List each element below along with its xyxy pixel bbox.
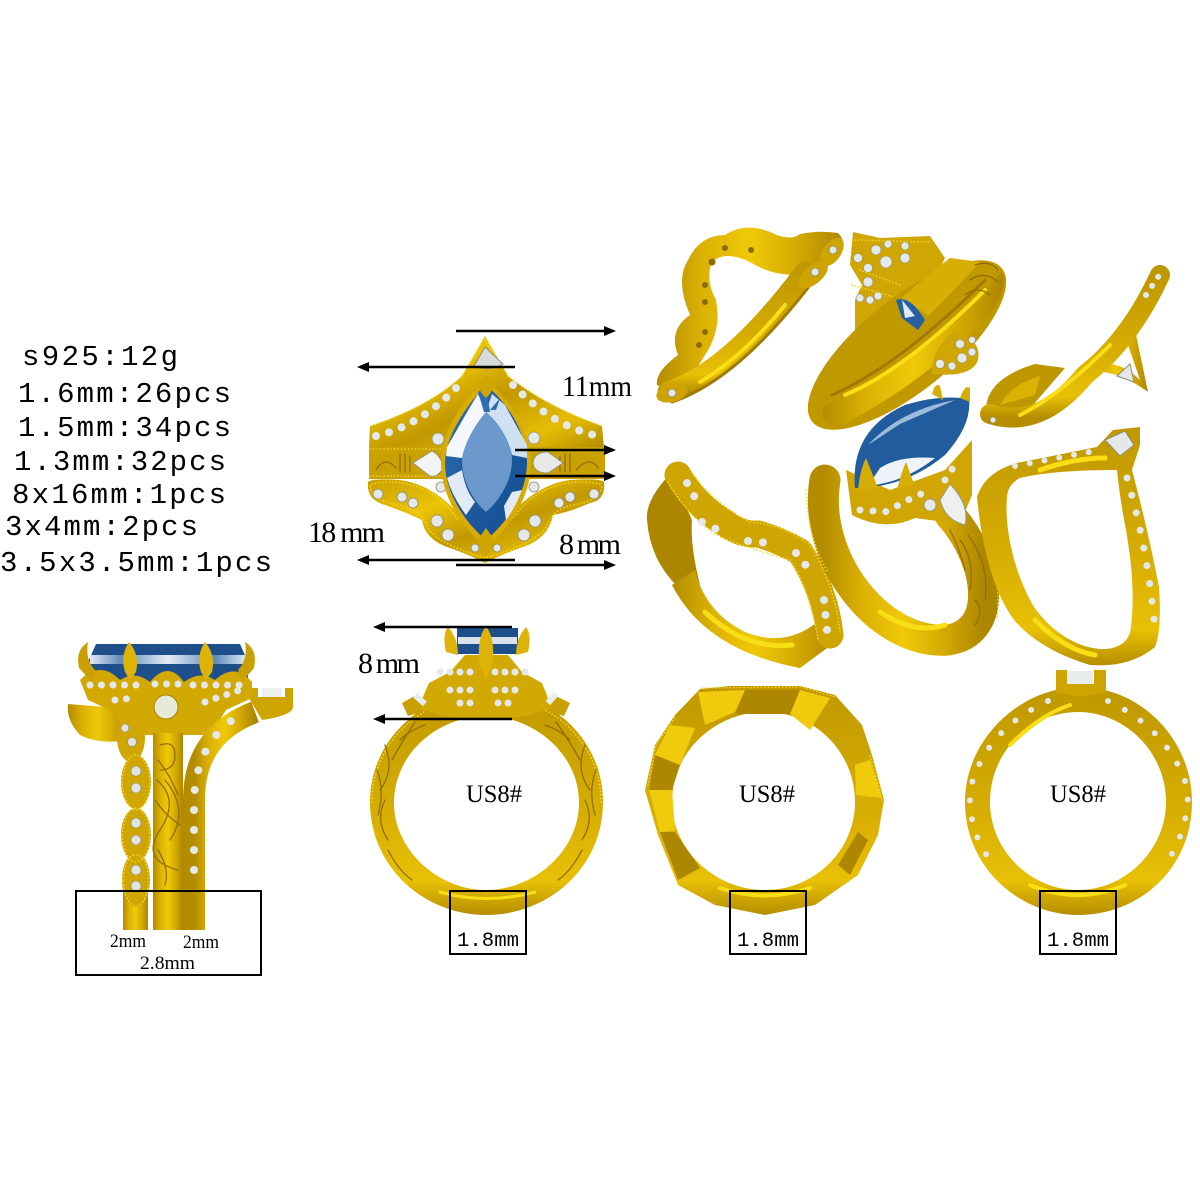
right wing setting [250,688,293,720]
chevron band [369,336,604,448]
specification text block: 3x4mm:2pcs [5,511,198,544]
specification text block: 1.5mm:34pcs [18,412,231,445]
label 11mm: 11mm [562,370,632,403]
engraved centre band [153,733,183,930]
label 8mm: 8 mm [559,528,621,561]
dimension arrows on front view [357,326,616,570]
side view of stacked rings [68,642,293,930]
exploded ring: scalloped band upper left [654,228,849,406]
small blue stone glimpse [896,299,925,330]
curved right band [194,712,255,930]
thickness box [730,891,806,954]
side pear stones [413,451,442,476]
specification text block: 3.5x3.5mm:1pcs [0,547,272,580]
label 2mm left: 2mm [110,931,146,952]
tilted marquise stone [855,397,969,488]
front view of ring set with marquise stone [368,336,605,563]
engraved middle band [369,447,605,479]
front profile: chevron band [965,670,1192,915]
front profile: scalloped band [645,686,884,915]
label 8mm: 8 mm [358,647,420,680]
specification text block: 1.3mm:32pcs [14,446,226,479]
blue stone side profile [88,644,248,688]
exploded ring: chevron band upper right [986,274,1160,423]
thickness box [450,891,526,954]
left wing [68,704,128,742]
set-through holes [696,245,754,348]
front profile: engraved engagement ring [370,626,603,915]
scalloped lower band [368,479,604,563]
specification text block: s925:12g [22,341,178,374]
crown [418,655,552,718]
specification text block [0,341,272,580]
thickness label: 1.8mm [1047,930,1109,953]
dimension arrows on engagement ring [373,622,512,724]
exploded ring: centre engagement ring with blue stone [806,385,998,640]
blue stone [457,628,518,654]
thickness label: 1.8mm [737,930,799,953]
specification text block: 8x16mm:1pcs [12,479,226,512]
gold stone bezel [441,380,531,546]
marquise blue stone [445,385,527,540]
top setting [1056,670,1106,697]
tilted band solid [783,232,1031,458]
exploded ring: scalloped band lower left [647,470,840,668]
crown cluster [850,232,945,330]
exploded ring: chevron band lower right [977,427,1160,665]
thickness label: 1.8mm [457,930,519,953]
crown base [846,440,972,524]
crown and setting [80,670,252,735]
size label: US8# [1050,781,1106,808]
size label: US8# [739,781,795,808]
label 18mm: 18 mm [308,516,385,549]
size label: US8# [466,781,522,808]
label 2mm right: 2mm [183,932,219,953]
top and bottom prongs [479,376,493,556]
marquise link band [123,880,148,930]
specification text block: 1.6mm:26pcs [18,378,231,411]
lower stone cluster [932,330,979,375]
thickness box [1040,891,1116,954]
width measurement box [76,891,261,975]
label 2.8mm: 2.8mm [140,953,195,974]
exploded ring: engagement ring tilted from above [783,232,1031,458]
